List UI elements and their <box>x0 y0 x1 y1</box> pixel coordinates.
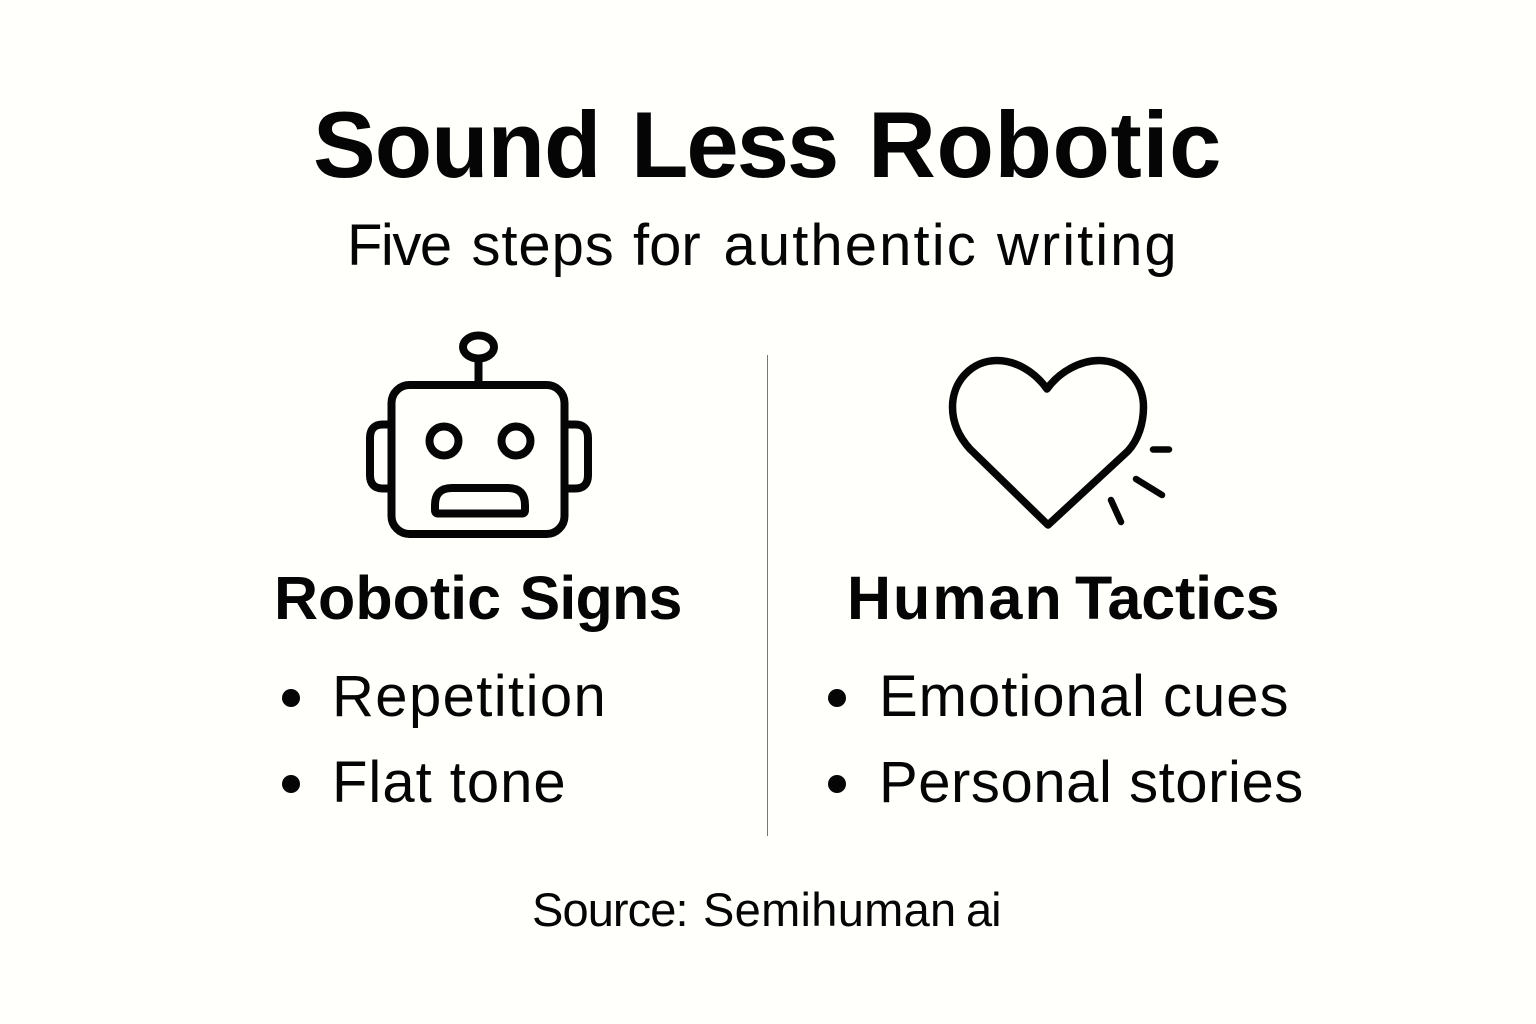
text: emotional cues: Emotional cues <box>879 664 1290 729</box>
center divider <box>767 355 768 836</box>
subtitle: steps <box>472 213 615 278</box>
subtitle <box>347 213 1179 278</box>
heading: robotic signs <box>274 564 682 632</box>
icon: heart <box>948 356 1172 529</box>
source note: Source: <box>532 883 688 936</box>
text: repetition: Repetition <box>332 664 607 729</box>
title <box>313 92 1222 197</box>
source note: ai <box>966 883 1001 936</box>
subtitle: writing <box>997 213 1179 278</box>
bullet: flat tone <box>282 775 300 793</box>
subtitle: for <box>633 213 701 278</box>
bullet: repetition <box>282 689 300 707</box>
heading: human tactics: Human <box>847 564 1064 632</box>
bullet: emotional cues <box>828 689 846 707</box>
bullet: personal stories <box>828 775 846 793</box>
source note: Semihuman <box>703 883 956 936</box>
heading: robotic signs: Signs <box>520 564 682 632</box>
heading: human tactics <box>847 564 1279 632</box>
title: Less <box>631 92 837 197</box>
subtitle: Five <box>347 213 451 278</box>
title: Robotic <box>868 92 1222 197</box>
icon: robot <box>366 332 592 538</box>
text: flat tone: Flat tone <box>332 750 567 815</box>
source note <box>532 883 1001 936</box>
subtitle: authentic <box>724 213 978 278</box>
title: Sound <box>313 92 600 197</box>
heading: human tactics: Tactics <box>1075 564 1279 632</box>
text: personal stories: Personal stories <box>879 750 1304 815</box>
heading: robotic signs: Robotic <box>274 564 501 632</box>
